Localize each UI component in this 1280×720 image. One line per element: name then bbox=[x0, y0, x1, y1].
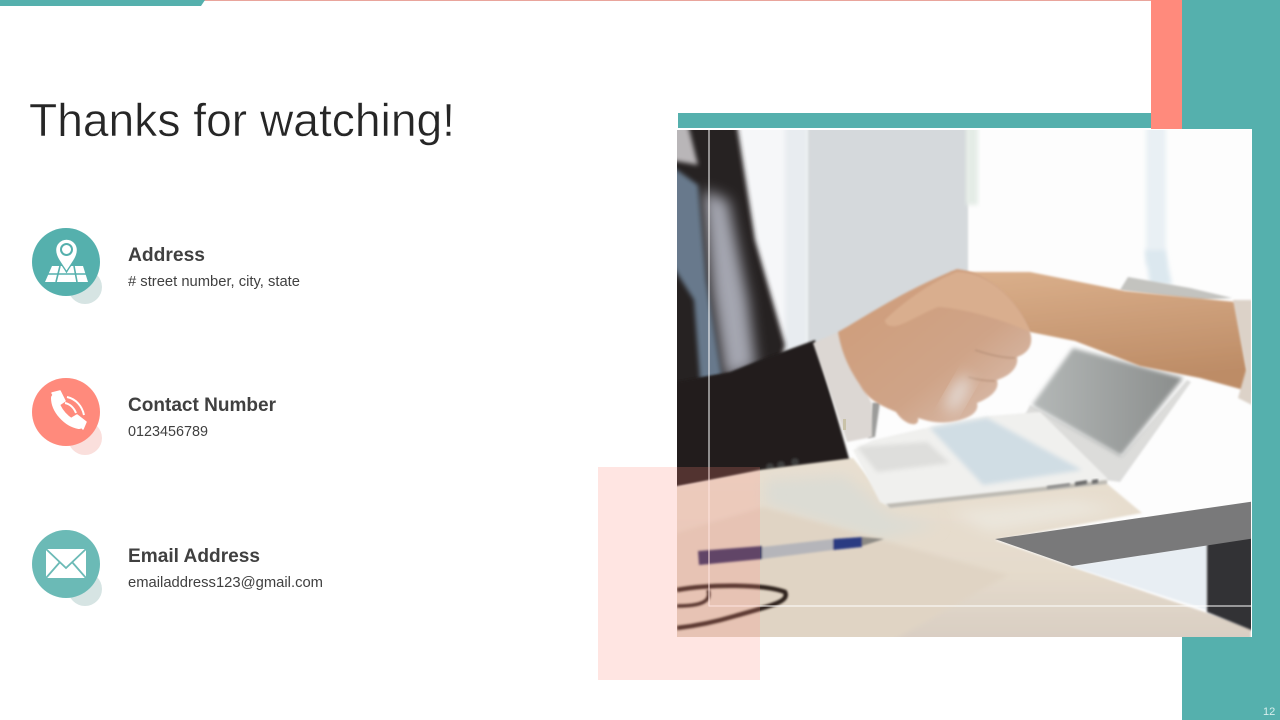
clasped hands bbox=[838, 269, 1031, 424]
teal bar above photo bbox=[678, 113, 1151, 128]
blurred office background bbox=[735, 120, 1172, 375]
translucent pink block bbox=[598, 467, 760, 680]
contact: phone bbox=[32, 378, 276, 455]
coral block bbox=[1151, 0, 1182, 129]
grey table edge and leg bbox=[995, 501, 1256, 632]
top accent bar bbox=[0, 0, 1151, 6]
table reflection bbox=[770, 479, 1090, 533]
pen bbox=[698, 537, 884, 565]
suit, shirt and tie bbox=[670, 125, 850, 488]
right teal column bbox=[1182, 0, 1280, 720]
address text: # street number, city, state bbox=[128, 274, 300, 290]
email heading: Email Address bbox=[128, 545, 260, 567]
shirt cuff bbox=[813, 332, 880, 442]
white backing of photo bbox=[1182, 129, 1252, 637]
contact: email bbox=[32, 530, 323, 606]
laptop base bbox=[853, 412, 1107, 508]
contact: address bbox=[32, 228, 300, 304]
photo: business handshake bbox=[670, 120, 1256, 645]
title: Thanks for watching! bbox=[29, 94, 455, 146]
right cuff bbox=[1233, 300, 1252, 405]
icon: map pin bbox=[32, 228, 102, 304]
email address: emailaddress123@gmail.com bbox=[128, 575, 323, 591]
glasses bbox=[677, 586, 786, 628]
forearm bbox=[950, 272, 1251, 392]
phone heading: Contact Number bbox=[128, 394, 276, 416]
icon: phone bbox=[32, 378, 102, 455]
laptop lid and screen bbox=[1025, 277, 1232, 482]
phone number: 0123456789 bbox=[128, 424, 208, 440]
suit sleeve buttons bbox=[766, 458, 799, 471]
address heading: Address bbox=[128, 244, 205, 266]
white outline frame bbox=[709, 130, 1252, 606]
sheet of paper bbox=[760, 509, 944, 561]
icon: envelope bbox=[32, 530, 102, 606]
table surface bbox=[670, 458, 1251, 645]
page number: 12 bbox=[1263, 706, 1275, 718]
